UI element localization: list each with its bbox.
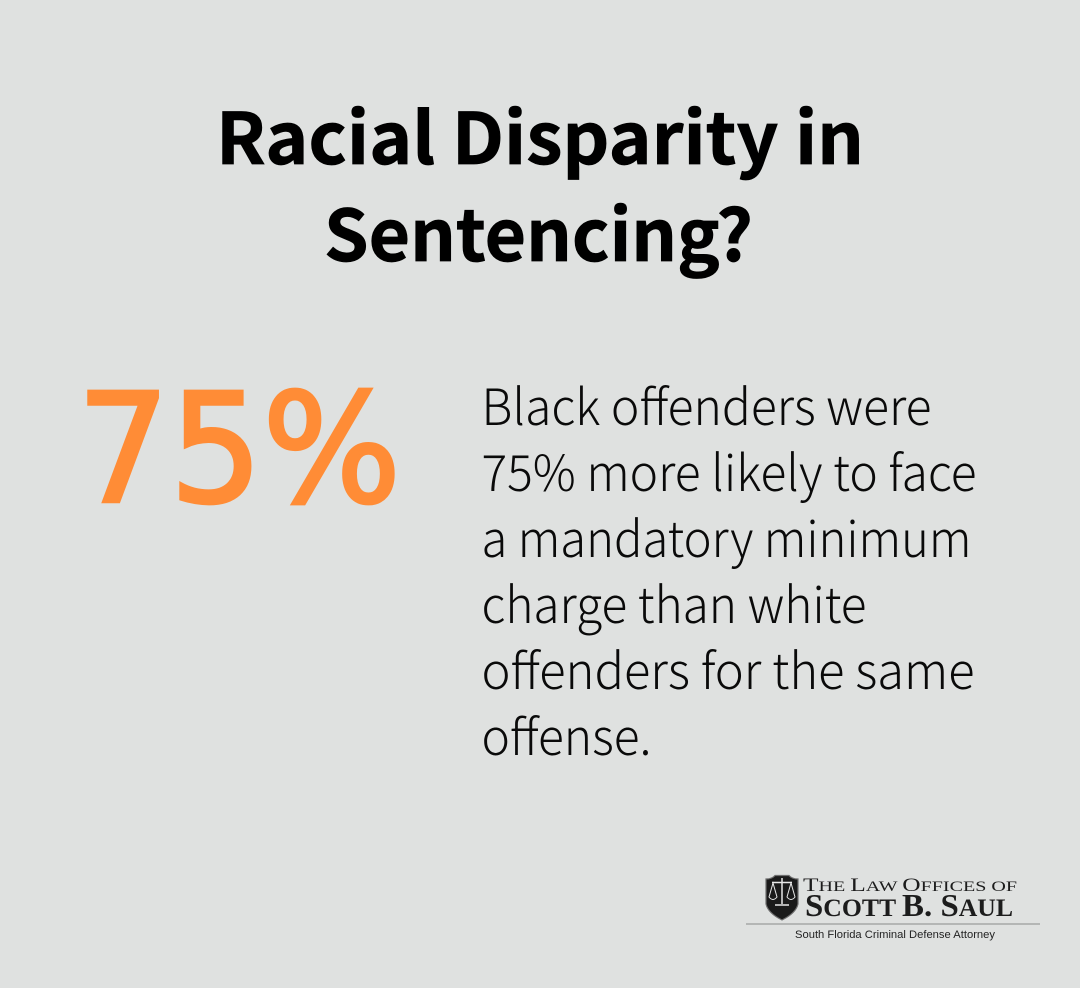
description text: 75% more likely to face: [482, 434, 976, 506]
description text: charge than white: [482, 566, 866, 638]
description text: [482, 368, 976, 770]
firm name: T HE L AW O FFICES OF: [803, 875, 1017, 896]
description text: offenders for the same: [482, 632, 974, 704]
tagline: South Florida Criminal Defense Attorney: [795, 929, 996, 941]
title: [216, 83, 864, 282]
logo: [746, 875, 1040, 941]
description text: offense.: [482, 698, 652, 770]
big statistic: 75%: [77, 362, 401, 538]
title: Sentencing?: [324, 180, 753, 282]
description text: a mandatory minimum: [482, 500, 972, 572]
description text: Black offenders were: [482, 368, 932, 440]
title: Racial Disparity in: [216, 83, 864, 185]
icon: shield with scales: [766, 876, 798, 920]
attorney name: SCOTT B. SAUL: [805, 887, 1013, 923]
